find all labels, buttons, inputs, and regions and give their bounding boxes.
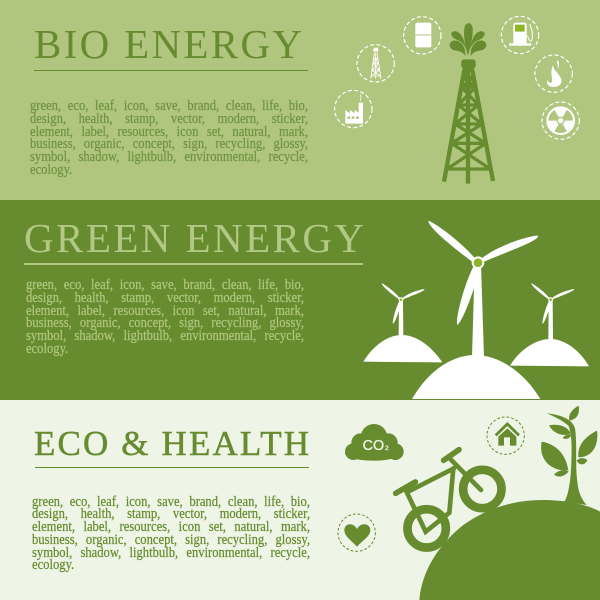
text block: eco and health keywords: design, health, stamp, vector, modern, sticker, xyxy=(32,506,310,522)
bicycle xyxy=(396,450,502,548)
icon: factory xyxy=(335,90,372,128)
text block: bio energy keywords: green, eco, leaf, icon, save, brand, clean, life, bio, xyxy=(30,98,308,113)
text block: eco and health keywords xyxy=(32,493,310,573)
globe hill xyxy=(419,500,600,600)
large wind turbine xyxy=(412,221,540,399)
derrick braces xyxy=(447,77,490,169)
text block: eco and health keywords: green, eco, leaf, icon, save, brand, clean, life, bio, xyxy=(32,493,310,509)
illustration: wind turbines on hills xyxy=(363,220,589,399)
plant xyxy=(541,406,597,505)
divider: eco and health xyxy=(35,466,309,468)
heading: green energy: GREEN ENERGY xyxy=(24,215,364,261)
illustration: oil derrick and energy icons xyxy=(334,16,580,184)
icon: oil derrick xyxy=(444,23,493,184)
text block: bio energy keywords: element, label, resources, icon set, natural, mark, xyxy=(30,123,308,139)
text block: bio energy keywords: ecology. xyxy=(30,162,72,177)
divider: bio energy xyxy=(34,70,308,71)
icon: co2 cloud xyxy=(345,424,404,461)
heading: eco and health: ECO & HEALTH xyxy=(34,424,309,463)
text block: green energy keywords: green, eco, leaf, icon, save, brand, clean, life, bio, xyxy=(26,277,304,292)
text block: green energy keywords: business, organic, concept, sign, recycling, glossy, xyxy=(26,315,304,331)
text block: eco and health keywords: element, label, resources, icon set, natural, mark, xyxy=(32,519,310,534)
text block: eco and health keywords: business, organic, concept, sign, recycling, glossy, xyxy=(32,531,310,547)
text block: green energy keywords: element, label, resources, icon set, natural, mark, xyxy=(26,302,304,318)
icon: flame xyxy=(535,55,572,92)
text block: green energy keywords xyxy=(26,277,304,356)
oil gusher xyxy=(450,23,486,56)
right wind turbine xyxy=(510,283,589,366)
icon: small derrick xyxy=(357,45,394,82)
icon: heart xyxy=(338,514,375,551)
text block: green energy keywords: symbol, shadow, lightbulb, environmental, recycle, xyxy=(26,328,304,344)
text block: green energy keywords: ecology. xyxy=(26,341,68,356)
icon: home xyxy=(487,417,524,454)
divider: green energy xyxy=(24,263,363,264)
text block: eco and health keywords: ecology. xyxy=(32,557,74,573)
co2 label: 2 xyxy=(385,445,389,452)
icon: barrel xyxy=(404,17,441,54)
panel: eco and health xyxy=(0,400,600,600)
icon: radiation xyxy=(542,102,579,139)
icon: fuel pump xyxy=(501,16,539,54)
derrick legs xyxy=(444,67,493,184)
text block: eco and health keywords: symbol, shadow, lightbulb, environmental, recycle, xyxy=(32,544,310,560)
heading: bio energy: BIO ENERGY xyxy=(34,21,302,67)
left wind turbine xyxy=(363,283,442,362)
panel: bio energy xyxy=(0,0,600,200)
panel: green energy xyxy=(0,200,600,400)
text block: green energy keywords: design, health, stamp, vector, modern, sticker, xyxy=(26,289,304,305)
text block: bio energy keywords: business, organic, concept, sign, recycling, glossy, xyxy=(30,136,308,152)
text block: bio energy keywords: symbol, shadow, lightbulb, environmental, recycle, xyxy=(30,149,308,165)
text block: bio energy keywords: design, health, stamp, vector, modern, sticker, xyxy=(30,110,308,126)
illustration: bicycle, globe, plant and eco icons xyxy=(338,406,600,600)
derrick cap xyxy=(461,59,476,68)
co2 label: CO xyxy=(363,438,384,454)
text block: bio energy keywords xyxy=(30,98,308,178)
